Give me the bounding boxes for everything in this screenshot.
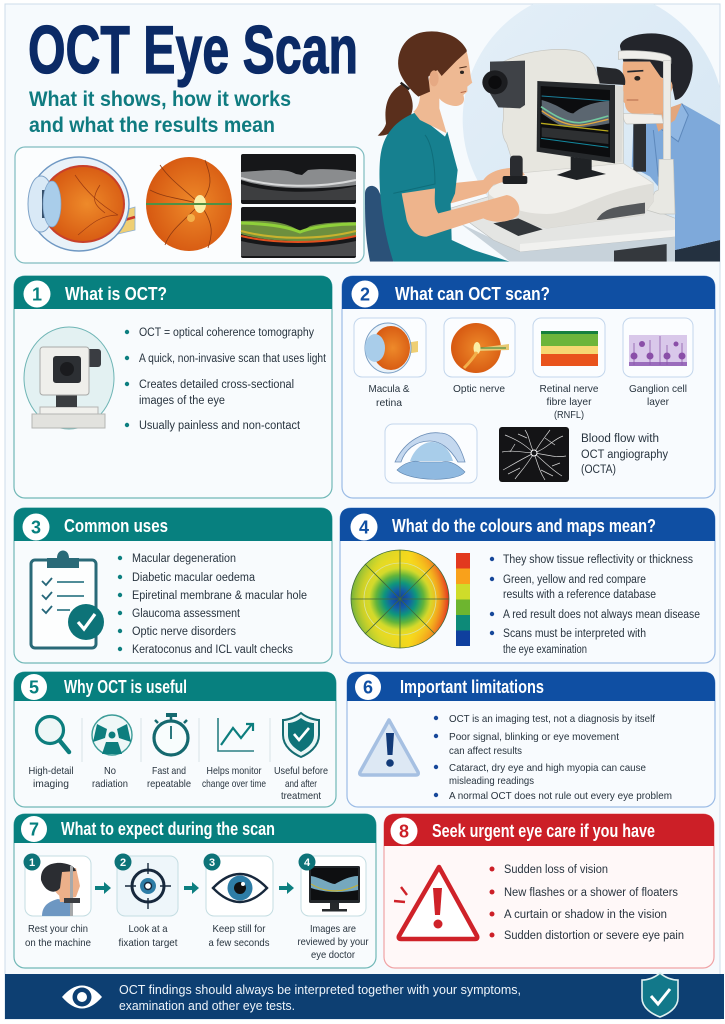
labels: scan steps: fixation target xyxy=(118,937,178,949)
label: Ganglion cell xyxy=(629,383,687,395)
text: OCT definition bullets: A quick, non-invasive scan that uses light xyxy=(139,353,327,365)
illustration: technician scanning a patient xyxy=(365,0,724,262)
labels: scan steps: Images are xyxy=(310,923,356,935)
chart: thickness map xyxy=(351,550,449,648)
text: OCTA caption xyxy=(581,433,668,476)
heading 7 xyxy=(14,814,376,843)
text: OCT definition bullets: Creates detailed cross-sectional xyxy=(139,379,294,391)
arrow xyxy=(95,882,111,894)
label xyxy=(540,383,599,421)
panel 6: Important limitations xyxy=(347,672,715,807)
heading 8 xyxy=(384,814,714,846)
badge 3: 3 xyxy=(209,857,215,869)
labels: scan steps: eye doctor xyxy=(311,949,355,961)
text: colour meanings: results with a reference database xyxy=(503,589,656,601)
text: colour meanings: Scans must be interpreted with xyxy=(503,628,646,640)
label xyxy=(368,383,410,409)
text: OCTA caption: (OCTA) xyxy=(581,464,616,476)
item: optic nerve xyxy=(444,318,515,395)
label xyxy=(629,383,687,408)
panel 5: Why OCT is useful xyxy=(14,672,336,807)
text: urgent symptoms: A curtain or shadow in the vision xyxy=(504,909,667,921)
label: fibre layer xyxy=(546,396,592,408)
labels: benefits xyxy=(28,765,328,802)
panel 1: What is OCT? xyxy=(14,276,332,498)
labels: benefits: and after xyxy=(285,778,317,790)
subtitle xyxy=(29,88,291,137)
labels: scan steps: Look at a xyxy=(128,923,168,935)
badge 2: 2 xyxy=(120,857,126,869)
text: colour meanings: the eye examination xyxy=(503,644,587,656)
icon: magnifier xyxy=(36,716,69,752)
text: OCT definition bullets: Usually painless and non-contact xyxy=(139,420,301,432)
text: urgent symptoms xyxy=(490,864,684,942)
arrow xyxy=(184,882,199,894)
text: limitations: misleading readings xyxy=(449,775,534,787)
icon: retina fundus xyxy=(146,157,232,251)
arrow xyxy=(279,882,294,894)
heading 5: Why OCT is useful xyxy=(64,677,187,697)
text: OCTA caption: Blood flow with xyxy=(581,433,659,445)
labels: benefits: High-detail xyxy=(28,765,74,777)
background circle xyxy=(462,4,720,218)
text: OCTA caption: OCT angiography xyxy=(581,449,668,461)
text: limitations: can affect results xyxy=(449,745,522,757)
step 3: keep still xyxy=(204,854,273,916)
heading 8: Seek urgent eye care if you have xyxy=(432,821,655,841)
icon: eye cross-section xyxy=(28,157,135,251)
heading 6 xyxy=(347,672,715,701)
labels: benefits: imaging xyxy=(33,778,69,790)
heading 6: Important limitations xyxy=(400,677,544,697)
panel 4: colours and maps xyxy=(340,508,715,663)
icon: eye xyxy=(62,986,102,1008)
text: colour meanings: They show tissue reflectivity or thickness xyxy=(503,554,693,566)
text: uses list xyxy=(118,553,307,656)
step 4: images reviewed xyxy=(298,854,366,916)
icon: trend chart xyxy=(218,718,254,751)
text: uses list: Epiretinal membrane & macular hole xyxy=(132,590,307,602)
icon: OCT device xyxy=(24,327,114,429)
text: OCT definition bullets: images of the eye xyxy=(139,395,225,407)
text: uses list: Glaucoma assessment xyxy=(132,608,241,620)
text: limitations: Poor signal, blinking or eye movement xyxy=(449,731,619,743)
label: layer xyxy=(647,396,669,408)
panel 2: What can OCT scan? xyxy=(342,276,715,498)
item: anterior segment xyxy=(385,424,477,483)
panel 8: urgent care xyxy=(384,814,714,968)
text: colour meanings xyxy=(490,554,700,656)
heading 6: 6 xyxy=(363,678,373,698)
icon: stopwatch xyxy=(154,713,188,755)
text: urgent symptoms: Sudden loss of vision xyxy=(504,864,608,876)
heading 8: 8 xyxy=(399,822,409,842)
icon: shield xyxy=(283,713,319,757)
heading 5 xyxy=(14,672,336,701)
heading 3: 3 xyxy=(31,518,41,538)
chin rest and forehead bar xyxy=(618,51,675,214)
labels: benefits: Helps monitor xyxy=(206,765,262,777)
labels: benefits: repeatable xyxy=(147,778,191,790)
title: OCT Eye Scan xyxy=(28,12,358,88)
step 2: fixation target xyxy=(114,854,178,916)
desk xyxy=(450,197,693,262)
labels: scan steps: Keep still for xyxy=(212,923,266,935)
heading 2 xyxy=(342,276,715,309)
heading 3 xyxy=(14,508,332,541)
icon: no radiation xyxy=(92,715,132,755)
item: macula and retina xyxy=(354,318,426,409)
text: uses list: Diabetic macular oedema xyxy=(132,572,256,584)
text: colour meanings: A red result does not always mean disease xyxy=(503,609,700,621)
heading 7: 7 xyxy=(29,820,39,840)
heading 2: What can OCT scan? xyxy=(395,284,550,304)
keyboard xyxy=(493,218,543,236)
text: footer note: OCT findings should always be interpreted together with your symptoms, xyxy=(119,982,521,997)
badge 1: 1 xyxy=(29,857,35,869)
icon: clipboard xyxy=(31,550,104,648)
item: ganglion cell layer xyxy=(623,318,693,408)
technician xyxy=(378,31,525,262)
joystick xyxy=(503,156,527,184)
badge 4: 4 xyxy=(304,857,311,869)
panel 3: Common uses xyxy=(14,508,332,663)
labels: scan steps: reviewed by your xyxy=(298,936,369,948)
label: (RNFL) xyxy=(554,409,584,421)
OCT machine xyxy=(482,49,653,228)
text: limitations: Cataract, dry eye and high myopia can cause xyxy=(449,762,646,774)
icon: warning triangle xyxy=(360,720,418,775)
subtitle: What it shows, how it works xyxy=(29,88,291,111)
chair xyxy=(365,186,393,262)
text: limitations xyxy=(434,713,672,802)
heading 4: 4 xyxy=(359,518,369,538)
label: Optic nerve xyxy=(453,383,505,395)
dividers xyxy=(82,718,270,762)
step 1: chin rest xyxy=(24,854,91,916)
text: OCT definition bullets xyxy=(125,327,327,432)
text: OCT definition bullets: OCT = optical coherence tomography xyxy=(139,327,314,339)
text: urgent symptoms: New flashes or a shower of floaters xyxy=(504,887,678,899)
text: uses list: Keratoconus and ICL vault checks xyxy=(132,644,293,656)
legend: colour bar xyxy=(456,553,470,646)
icon: footer shield xyxy=(642,973,678,1017)
heading 3: Common uses xyxy=(64,516,168,536)
labels: benefits: No xyxy=(104,765,116,777)
labels: benefits: change over time xyxy=(202,778,266,790)
text: footer note xyxy=(119,982,521,1013)
labels: scan steps: Rest your chin xyxy=(28,923,88,935)
text: urgent symptoms: Sudden distortion or severe eye pain xyxy=(504,930,684,942)
labels: benefits: Fast and xyxy=(152,765,186,777)
patient xyxy=(620,33,720,262)
heading 2: 2 xyxy=(360,284,370,304)
heading 4: What do the colours and maps mean? xyxy=(392,516,656,536)
label: retina xyxy=(376,397,402,409)
label: Retinal nerve xyxy=(540,383,599,395)
labels: benefits: treatment xyxy=(281,790,321,802)
text: footer note: examination and other eye tests. xyxy=(119,998,295,1013)
heading 1: What is OCT? xyxy=(65,284,167,304)
OCT scan coloured xyxy=(241,207,356,258)
heading 4 xyxy=(340,508,715,541)
text: colour meanings: Green, yellow and red compare xyxy=(503,574,646,586)
text: limitations: A normal OCT does not rule out every eye problem xyxy=(449,790,672,802)
panel: eye image strip xyxy=(15,147,364,263)
heading 5: 5 xyxy=(29,678,39,698)
panel 7: What to expect xyxy=(14,814,376,968)
labels: benefits: Useful before xyxy=(274,765,328,777)
labels: scan steps: on the machine xyxy=(25,937,91,949)
image: OCTA vessels xyxy=(499,427,569,482)
label: Macula & xyxy=(368,383,410,395)
labels: scan steps xyxy=(25,923,369,961)
labels: scan steps: a few seconds xyxy=(208,937,270,949)
item: RNFL xyxy=(533,318,605,421)
footer banner xyxy=(5,973,724,1019)
heading 7: What to expect during the scan xyxy=(61,819,275,839)
text: limitations: OCT is an imaging test, not a diagnosis by itself xyxy=(449,713,655,725)
text: uses list: Optic nerve disorders xyxy=(132,626,236,638)
icon: red warning triangle xyxy=(394,867,477,939)
heading 1 xyxy=(14,276,332,309)
subtitle: and what the results mean xyxy=(29,114,275,137)
header xyxy=(28,12,358,137)
OCT scan greyscale xyxy=(241,154,356,204)
labels: benefits: radiation xyxy=(92,778,128,790)
heading 1: 1 xyxy=(32,284,42,304)
text: uses list: Macular degeneration xyxy=(132,553,236,565)
